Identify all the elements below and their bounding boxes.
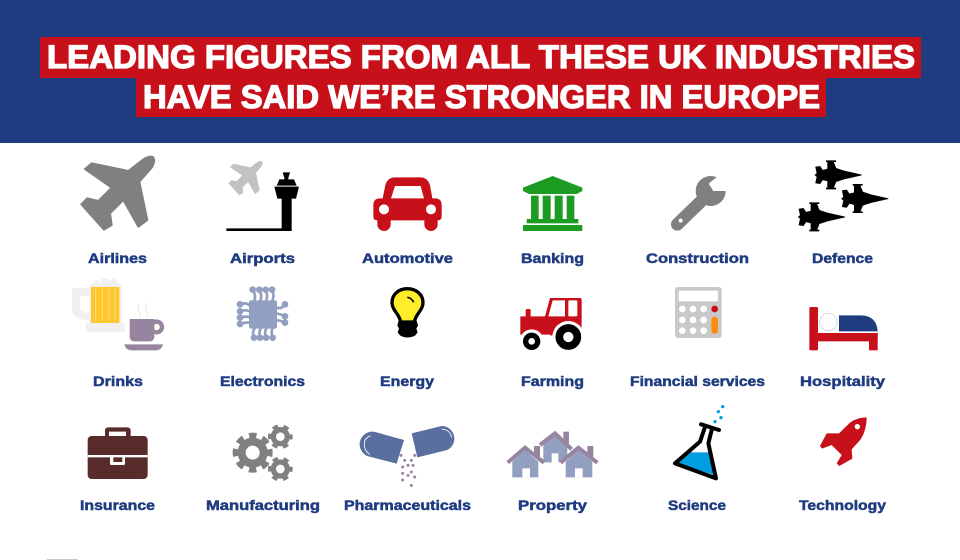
icon: three fighter jets <box>798 161 888 231</box>
icon: flask <box>675 405 724 478</box>
Pharmaceuticals item <box>344 426 471 513</box>
icon: rocket <box>820 417 867 466</box>
Energy item: Energy <box>380 373 434 389</box>
title: LEADING FIGURES FROM ALL THESE UK INDUSTRIES <box>47 39 915 75</box>
Farming item: Farming <box>521 373 584 389</box>
icon: spanner <box>677 175 732 224</box>
Property item: Property <box>518 497 587 513</box>
Electronics item: Electronics <box>220 373 305 389</box>
Banking item: Banking <box>521 250 584 266</box>
Science item <box>668 405 726 513</box>
Energy item <box>380 289 434 389</box>
Technology item: Technology <box>799 497 886 513</box>
icon: car <box>373 177 442 231</box>
icon: airliner <box>81 157 154 230</box>
Automotive item <box>362 177 453 266</box>
Electronics item <box>220 286 305 389</box>
icon: three gears <box>236 426 291 479</box>
Defence item: Defence <box>812 250 873 266</box>
Drinks item: Drinks <box>93 373 143 389</box>
Pharmaceuticals item: Pharmaceuticals <box>344 497 471 513</box>
icon: open capsule with powder <box>360 426 454 487</box>
icon: plane and control tower <box>226 161 299 231</box>
Hospitality item: Hospitality <box>800 373 885 389</box>
Airlines item <box>81 157 154 266</box>
icon: three houses <box>507 432 599 480</box>
icon: calculator <box>675 287 722 338</box>
icon: microchip <box>237 286 288 341</box>
Farming item <box>520 298 585 389</box>
Property item <box>507 432 599 513</box>
Science item: Science <box>668 497 726 513</box>
title: HAVE SAID WE’RE STRONGER IN EUROPE <box>143 79 820 115</box>
Drinks item <box>76 278 163 389</box>
Technology item <box>799 417 886 513</box>
icon: beer and coffee <box>76 278 163 350</box>
Airports item: Airports <box>230 250 295 266</box>
Manufacturing item: Manufacturing <box>206 497 320 513</box>
Manufacturing item <box>206 426 320 513</box>
Airlines item: Airlines <box>88 250 147 266</box>
icon: tractor <box>520 298 585 353</box>
Hospitality item <box>800 307 885 389</box>
Financial services item: Financial services <box>630 373 765 389</box>
icon: bank building <box>523 176 582 231</box>
Construction item <box>646 175 749 266</box>
Banking item <box>521 176 584 266</box>
icon: bed <box>809 307 878 350</box>
title <box>47 39 915 115</box>
Insurance item <box>80 427 155 513</box>
Insurance item: Insurance <box>80 497 155 513</box>
Construction item: Construction <box>646 250 749 266</box>
Airports item <box>226 161 299 266</box>
header banner <box>0 0 960 143</box>
Automotive item: Automotive <box>362 250 453 266</box>
Defence item <box>798 161 888 266</box>
icon: briefcase <box>88 427 148 479</box>
icon: light bulb <box>392 289 423 337</box>
Financial services item <box>630 287 765 389</box>
